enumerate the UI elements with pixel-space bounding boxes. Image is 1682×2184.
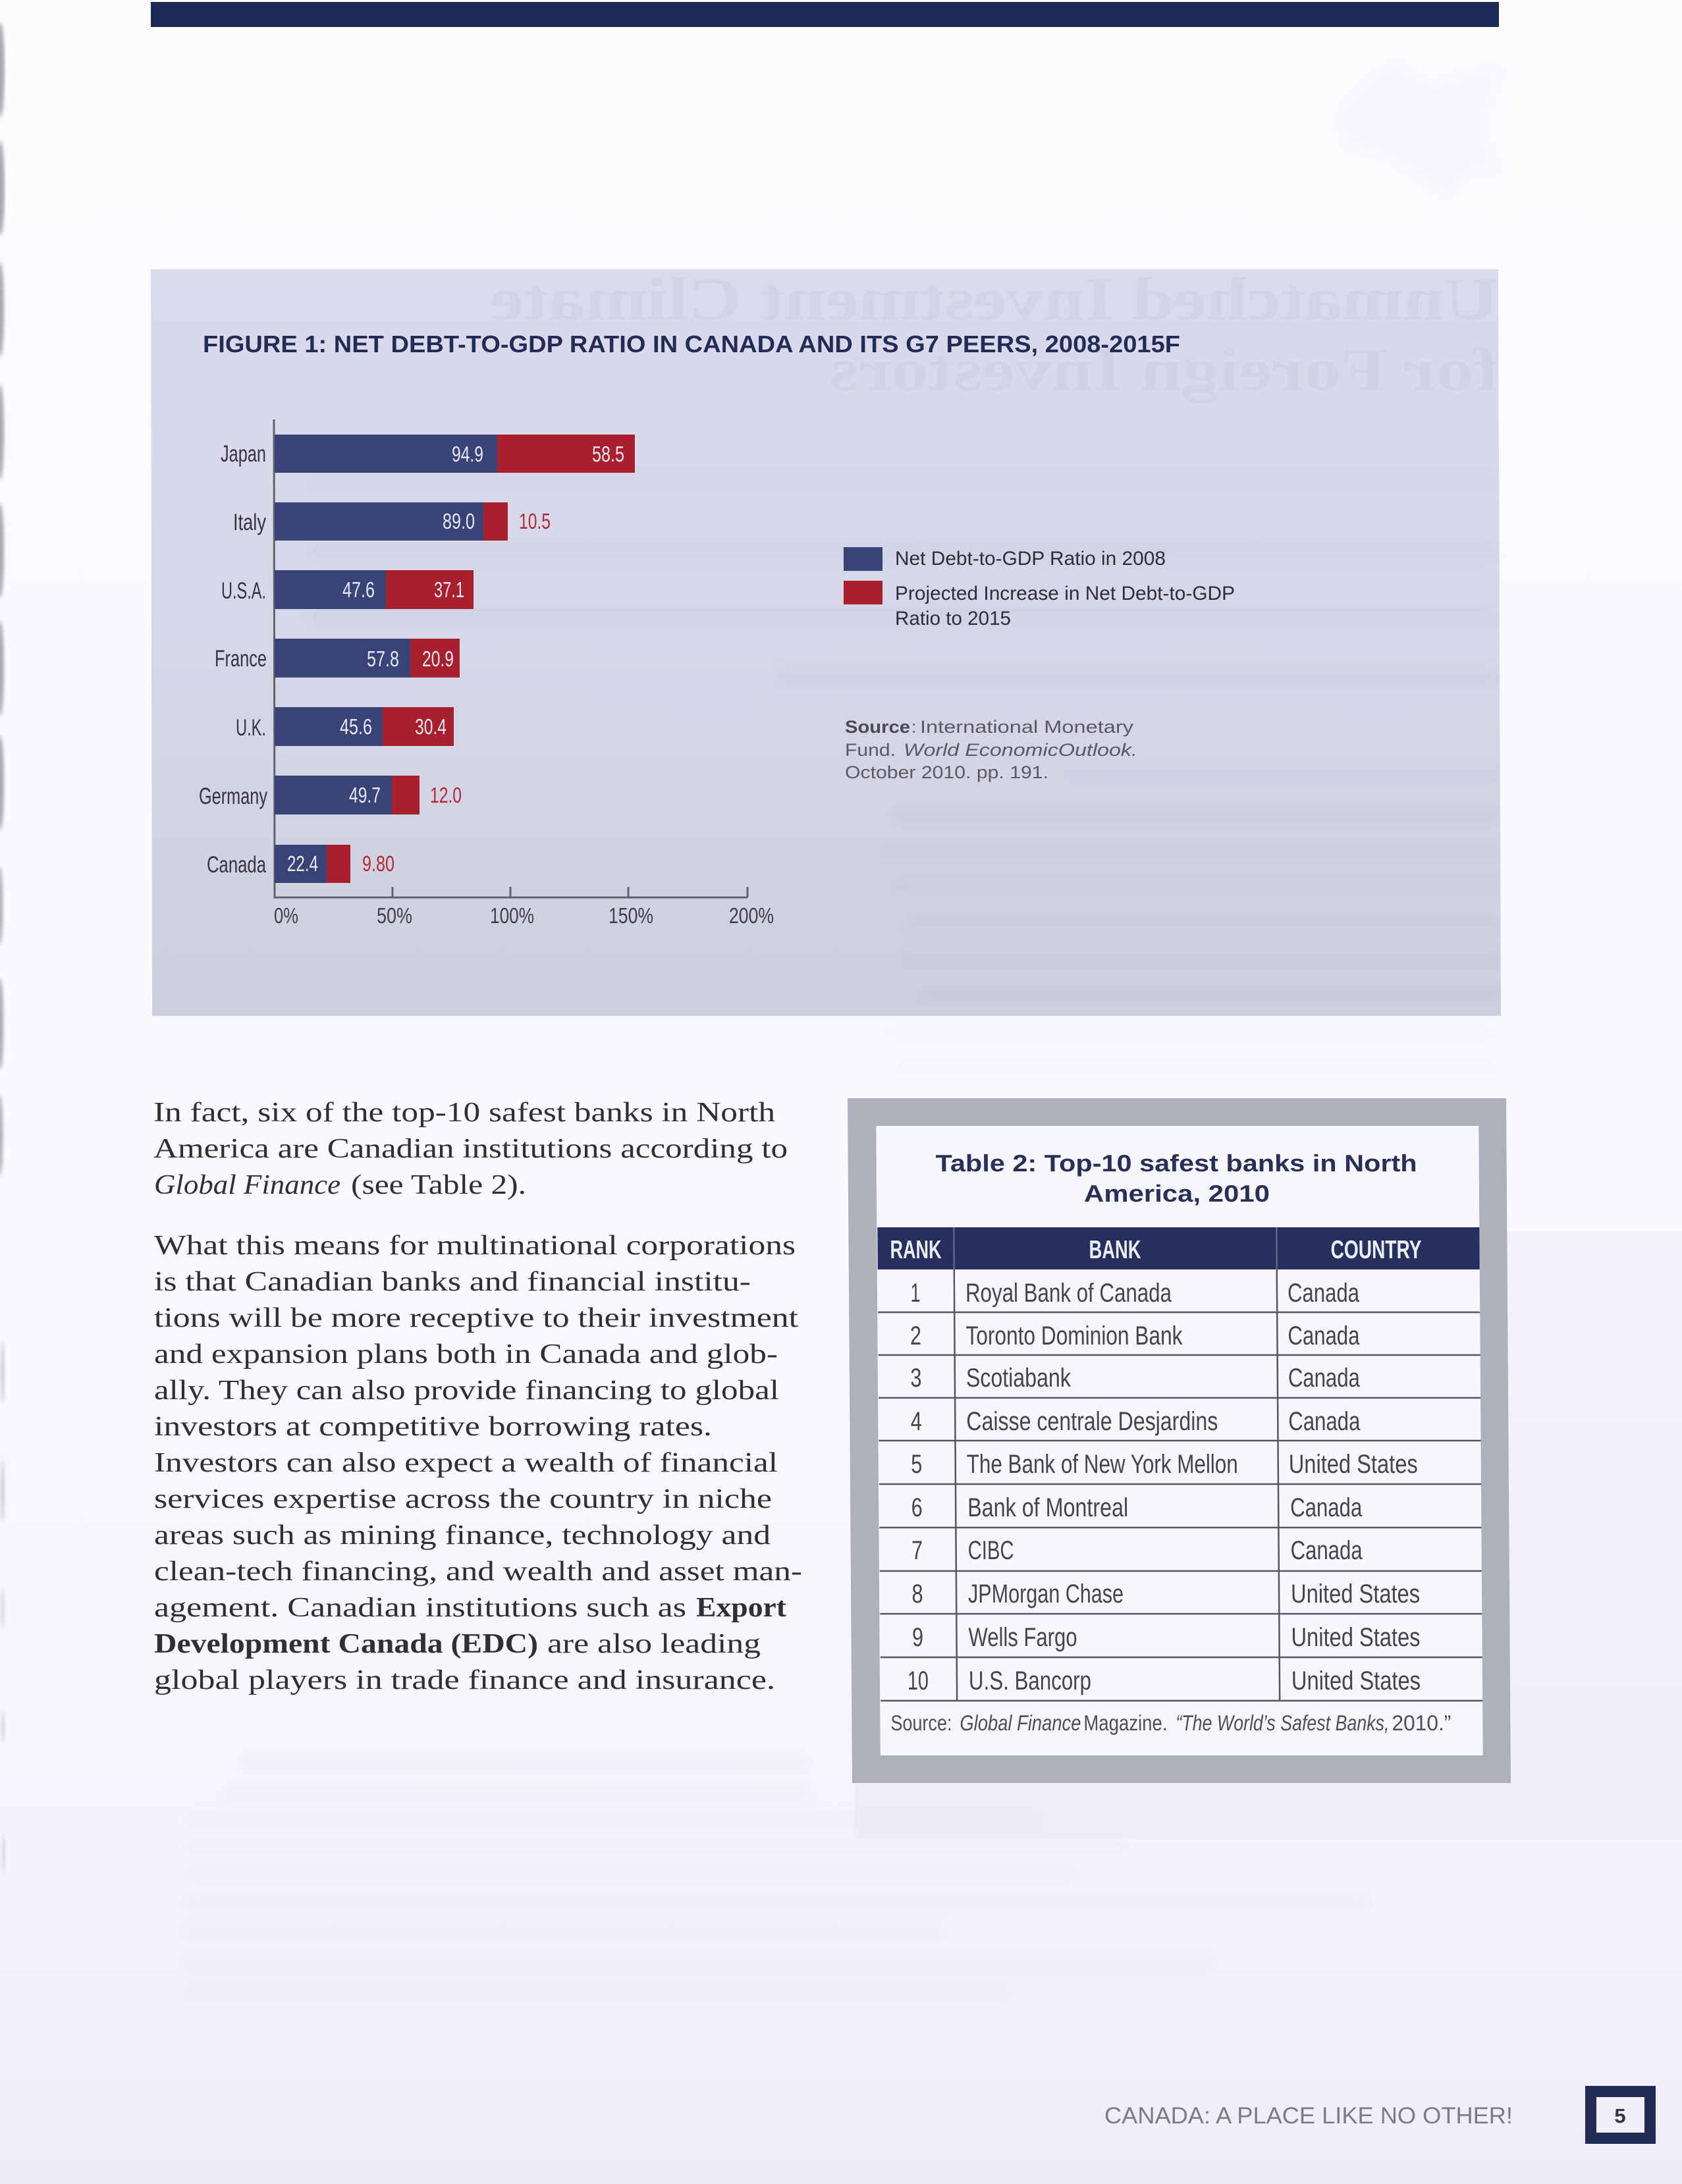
row 3 — [910, 1364, 1361, 1393]
bar row: U.K.: 45.6 — [340, 714, 372, 739]
table header row: COUNTRY — [1330, 1236, 1422, 1264]
body text column — [153, 1098, 802, 1695]
row 4: 4 — [911, 1407, 922, 1436]
row 6: Bank of Montreal — [967, 1493, 1128, 1522]
paragraph 2: ally. They can also provide financing to global — [154, 1375, 779, 1406]
bar row: Japan: Japan — [221, 441, 266, 467]
bar row: France: 20.9 — [422, 647, 454, 671]
row 9: United States — [1291, 1623, 1421, 1652]
x-axis labels: 150% — [609, 903, 653, 928]
panel: table 2 safest banks — [848, 1098, 1511, 1783]
row 4 — [911, 1407, 1361, 1436]
chart legend: Net Debt-to-GDP Ratio in 2008 — [895, 548, 1166, 570]
paragraph 2: What this means for multinational corporations — [154, 1231, 796, 1261]
row 4: Canada — [1288, 1407, 1361, 1436]
chart legend — [844, 547, 1235, 629]
bar row: U.K.: U.K. — [236, 715, 266, 741]
table header row — [877, 1227, 1480, 1269]
bar row: U.S.A.: 37.1 — [434, 577, 464, 602]
bar row: Japan: 58.5 — [592, 442, 624, 466]
row 6: 6 — [911, 1493, 923, 1522]
paragraph 2: tions will be more receptive to their investment — [154, 1303, 798, 1333]
bar row: Canada: Canada — [207, 852, 266, 878]
chart legend: Projected Increase in Net Debt-to-GDP — [895, 583, 1235, 604]
paragraph 2: are also leading — [547, 1629, 761, 1659]
row 10: U.S. Bancorp — [969, 1666, 1091, 1695]
figure source note — [845, 717, 1137, 782]
row 7: CIBC — [967, 1536, 1014, 1565]
table gray frame — [848, 1098, 1511, 1783]
bar row: U.K.: 30.4 — [415, 714, 447, 739]
bar row: France: France — [215, 646, 267, 672]
paragraph 1: In fact, six of the top-10 safest banks in North — [153, 1098, 775, 1128]
row 2: 2 — [910, 1321, 921, 1350]
paragraph 2: global players in trade finance and insurance. — [154, 1665, 775, 1695]
row 1: 1 — [910, 1279, 921, 1308]
paragraph 2: agement. Canadian institutions such as — [154, 1593, 686, 1623]
bar row: Canada — [207, 845, 394, 883]
figure source note: : — [911, 717, 917, 737]
bar row: Canada: 9.80 — [362, 851, 394, 876]
row 2: Canada — [1288, 1321, 1360, 1350]
paragraph 2: is that Canadian banks and financial institu- — [154, 1267, 751, 1297]
show-through footnote bands — [184, 1755, 1370, 1999]
bar row: Germany: Germany — [199, 784, 267, 809]
x-axis labels: 200% — [729, 903, 774, 928]
page number box — [1585, 2086, 1656, 2144]
figure source note: Source — [845, 717, 910, 737]
row 3: Canada — [1288, 1364, 1361, 1393]
figure source note: Fund. — [845, 740, 896, 760]
bar row: Italy: 10.5 — [519, 509, 551, 533]
show-through maple leaf — [1337, 59, 1506, 198]
binding hole shadows on left edge — [0, 22, 5, 1873]
bar row: Japan: 94.9 — [452, 442, 483, 466]
bar row: U.S.A.: 47.6 — [342, 577, 375, 602]
footer tagline: CANADA: A PLACE LIKE NO OTHER! — [1104, 2103, 1513, 2129]
panel: figure 1 background — [151, 269, 1501, 1016]
bar row: Canada: 22.4 — [287, 851, 318, 876]
paragraph 2: Investors can also expect a wealth of financial — [154, 1448, 778, 1478]
figure source note: World EconomicOutlook. — [904, 740, 1137, 760]
row 3: Scotiabank — [966, 1364, 1072, 1393]
bar row: France: 57.8 — [367, 647, 399, 671]
paragraph 2: Export — [696, 1593, 786, 1623]
row 8: United States — [1291, 1580, 1420, 1609]
paragraph 2 — [154, 1231, 802, 1695]
row 5: The Bank of New York Mellon — [967, 1450, 1238, 1479]
bar row: France — [215, 639, 460, 678]
bar row: U.S.A.: U.S.A. — [221, 578, 266, 604]
table white card — [876, 1126, 1483, 1755]
row 1: Canada — [1288, 1279, 1360, 1308]
table source note: 2010.” — [1392, 1711, 1451, 1735]
paragraph 1: (see Table 2). — [351, 1170, 526, 1200]
paragraph 2: investors at competitive borrowing rates. — [154, 1412, 712, 1442]
table header row: BANK — [1089, 1236, 1141, 1264]
table title — [936, 1150, 1417, 1207]
row 8 — [911, 1580, 1420, 1609]
row 3: 3 — [910, 1364, 922, 1393]
bar row: Italy: Italy — [233, 510, 266, 535]
table title: Table 2: Top-10 safest banks in North — [936, 1150, 1417, 1177]
row 6: Canada — [1290, 1493, 1363, 1522]
row 2 — [910, 1321, 1360, 1350]
top navy bar — [151, 2, 1499, 27]
row 10 — [908, 1666, 1421, 1695]
row 6 — [911, 1493, 1363, 1522]
table grid lines — [878, 1269, 1482, 1701]
table header row: RANK — [890, 1236, 942, 1264]
show-through heading (reverse of page) — [491, 265, 1498, 403]
row 5: United States — [1289, 1450, 1418, 1479]
row 10: United States — [1291, 1666, 1421, 1695]
paragraph 1: Global Finance — [154, 1170, 340, 1200]
chart axes — [274, 419, 747, 897]
row 9 — [912, 1623, 1421, 1652]
row 1 — [910, 1279, 1360, 1308]
paragraph 1: America are Canadian institutions according to — [153, 1134, 788, 1164]
paragraph 1 — [153, 1098, 788, 1200]
paragraph 2: and expansion plans both in Canada and glob- — [154, 1339, 778, 1370]
bar row: Germany: 12.0 — [430, 783, 462, 807]
bar row: Germany — [199, 776, 462, 814]
table source note: Magazine. — [1083, 1711, 1168, 1735]
table rows — [905, 1279, 1421, 1695]
x-axis labels: 0% — [274, 903, 298, 928]
bar chart: net debt-to-GDP ratio — [199, 419, 774, 928]
paragraph 2: Development Canada (EDC) — [154, 1629, 538, 1659]
row 9: 9 — [912, 1623, 923, 1652]
bar row: Germany: 49.7 — [349, 783, 381, 807]
figure source note: October 2010. pp. 191. — [845, 762, 1048, 782]
page number box: 5 — [1614, 2104, 1626, 2127]
bar row: Japan — [221, 435, 635, 473]
table source note: Global Finance — [960, 1711, 1081, 1735]
row 5: 5 — [911, 1450, 922, 1479]
bar row: Italy: 89.0 — [443, 509, 475, 533]
table source note: “The World’s Safest Banks, — [1176, 1711, 1390, 1735]
x-axis labels: 50% — [377, 903, 412, 928]
bar row: U.S.A. — [221, 570, 474, 609]
row 7: Canada — [1290, 1536, 1363, 1565]
chart legend: Ratio to 2015 — [895, 608, 1011, 629]
x-axis labels — [274, 903, 774, 928]
row 9: Wells Fargo — [968, 1623, 1077, 1652]
row 2: Toronto Dominion Bank — [965, 1321, 1183, 1350]
paragraph 2: clean-tech financing, and wealth and asset man- — [154, 1557, 802, 1587]
show-through heading (reverse of page): for Foreign Investors — [830, 336, 1498, 403]
show-through heading (reverse of page): Unmatched Investment Climate — [491, 265, 1498, 333]
table source note: Source: — [890, 1711, 952, 1735]
row 7: 7 — [911, 1536, 923, 1565]
paragraph 2: services expertise across the country in niche — [154, 1484, 772, 1514]
paragraph 2: areas such as mining finance, technology and — [154, 1520, 771, 1551]
row 8: JPMorgan Chase — [968, 1580, 1124, 1609]
figure source note: International Monetary — [920, 717, 1134, 737]
bar row: U.K. — [236, 707, 454, 746]
row 7 — [911, 1536, 1363, 1565]
table title: America, 2010 — [1084, 1180, 1270, 1207]
row 8: 8 — [911, 1580, 923, 1609]
bar row: Italy — [233, 502, 551, 541]
row 10: 10 — [908, 1666, 929, 1695]
x-axis labels: 100% — [490, 903, 534, 928]
row 1: Royal Bank of Canada — [965, 1279, 1172, 1308]
table source note — [890, 1711, 1451, 1735]
figure heading: FIGURE 1: NET DEBT-TO-GDP RATIO IN CANADA AND ITS G7 PEERS, 2008-2015F — [203, 331, 1180, 358]
row 5 — [911, 1450, 1418, 1479]
show-through band from reverse page — [854, 1231, 1682, 1839]
row 4: Caisse centrale Desjardins — [966, 1407, 1218, 1436]
show-through body text bands — [310, 473, 1502, 1076]
